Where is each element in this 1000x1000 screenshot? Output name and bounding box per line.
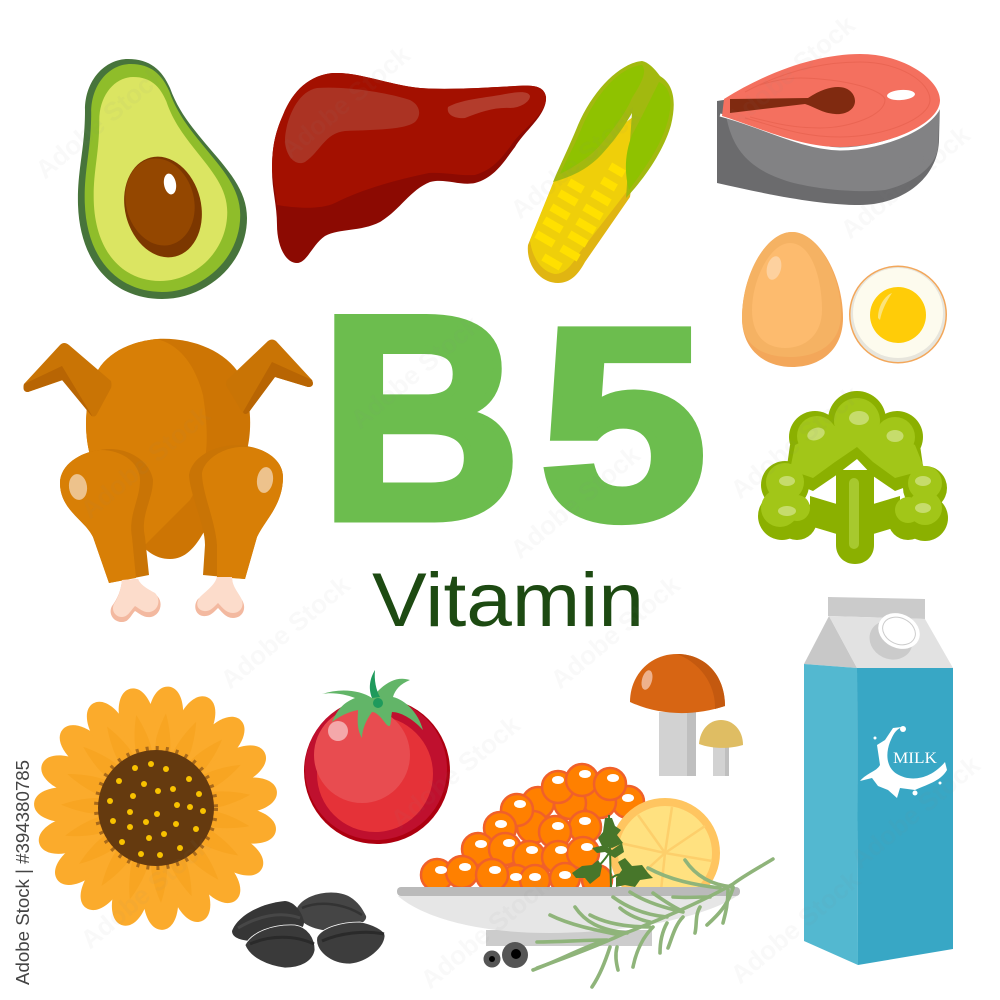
peppercorns — [484, 942, 528, 968]
icon: milk carton — [804, 597, 953, 965]
corn kernels — [534, 163, 626, 270]
icon: roast chicken — [24, 339, 313, 622]
carton cap — [863, 607, 926, 667]
chicken feet — [111, 577, 244, 622]
title: B5: 5 — [540, 272, 706, 576]
carton right face — [857, 668, 953, 965]
carton left face — [804, 664, 858, 965]
icon: liver — [272, 73, 546, 263]
icon: sunflower seeds — [232, 893, 385, 968]
title: B5 — [320, 257, 706, 580]
icon: whole egg — [742, 232, 843, 367]
icon: caviar plate — [397, 764, 773, 987]
icon: avocado — [78, 59, 247, 299]
lemon slice — [610, 798, 720, 887]
broccoli florets — [758, 391, 948, 541]
corn husk — [553, 61, 674, 198]
rosemary sprig — [533, 859, 773, 987]
chicken right wing — [226, 340, 313, 414]
carton gable — [804, 616, 953, 668]
parsley — [572, 815, 653, 887]
broccoli stem — [810, 470, 900, 564]
icon: tomato — [304, 670, 450, 844]
milk splash logo — [860, 726, 947, 798]
faint watermark: Adobe Stock — [545, 569, 686, 695]
tomato calyx — [322, 670, 423, 738]
icon: broccoli — [758, 391, 948, 564]
plate — [397, 887, 740, 946]
faint watermark: Adobe Stock — [215, 569, 356, 695]
faint watermark: Adobe Stock — [725, 864, 866, 990]
small mushroom — [699, 720, 743, 776]
faint watermark: Adobe Stock — [30, 59, 171, 185]
sunflower disc — [96, 748, 216, 868]
faint watermark: Adobe Stock — [275, 39, 416, 165]
faint watermark: Adobe Stock — [75, 829, 216, 955]
gaps between broccoli branches — [813, 483, 835, 503]
chicken left leg — [60, 449, 153, 583]
large mushroom stem — [659, 712, 696, 776]
faint watermark: Adobe Stock — [720, 9, 861, 135]
salmon bone — [730, 87, 855, 114]
icon: salmon steak — [717, 54, 941, 205]
sunflower petals — [33, 685, 279, 931]
chicken body — [86, 339, 250, 559]
faint watermark: Adobe Stock — [385, 709, 526, 835]
faint watermark: Adobe Stock — [725, 379, 866, 505]
milk splash logo: MILK — [893, 750, 937, 767]
chicken right leg — [189, 445, 283, 579]
sunflower seeds dots — [107, 761, 206, 858]
faint watermark: Adobe Stock — [75, 399, 216, 525]
title: B5: B — [320, 257, 521, 580]
icon: mushrooms — [630, 654, 743, 776]
faint watermark: Adobe Stock — [345, 309, 486, 435]
faint watermark: Adobe Stock — [505, 439, 646, 565]
avocado pit — [114, 148, 212, 266]
icon: corn — [528, 61, 674, 283]
carton top band — [828, 597, 925, 619]
subtitle: Vitamin: Vitamin — [372, 558, 644, 643]
faint watermark: Adobe Stock — [835, 119, 976, 245]
broccoli floret highlights — [761, 398, 942, 527]
icon: sunflower — [33, 685, 279, 931]
icon: boiled egg half — [849, 266, 947, 364]
faint watermark: Adobe Stock — [415, 869, 556, 995]
caviar roe — [421, 764, 644, 895]
faint watermark: Adobe Stock — [845, 749, 986, 875]
faint watermark: Adobe Stock — [505, 99, 646, 225]
chicken left wing — [24, 343, 112, 416]
vertical stock credit: Adobe Stock | #394380785 — [12, 760, 33, 985]
large mushroom cap — [630, 654, 725, 713]
